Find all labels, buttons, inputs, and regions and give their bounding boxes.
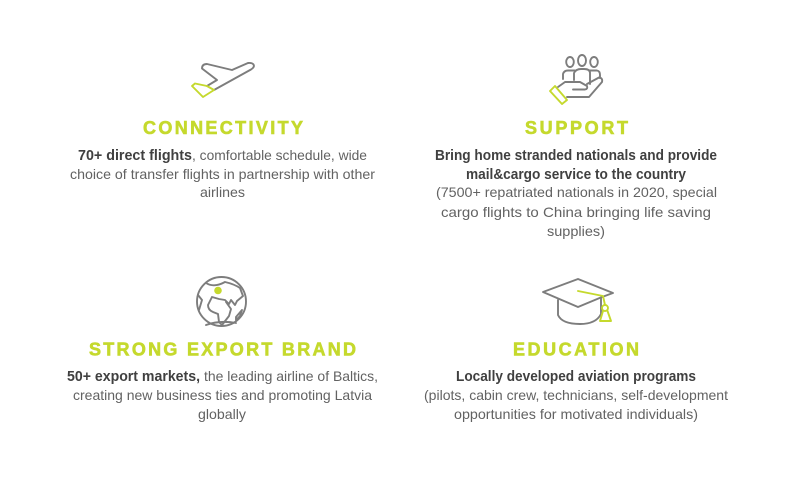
text block: support description: cargo flights to China bringing life saving (441, 204, 711, 220)
text block: support description: Bring home stranded nationals and provide (435, 148, 717, 164)
heading: education: EDUCATION (513, 340, 639, 360)
text block: education description: (pilots, cabin crew, technicians, self-development (424, 387, 728, 403)
text block: connectivity description: , comfortable schedule, wide (192, 147, 367, 163)
text block: connectivity description: choice of transfer flights in partnership with other (70, 166, 375, 182)
text block: export brand description: globally (198, 406, 246, 422)
text block: education description (424, 369, 728, 422)
heading: strong export brand: STRONG EXPORT BRAND (89, 340, 356, 360)
text block: export brand description: creating new business ties and promoting Latvia (73, 387, 372, 403)
text block: export brand description (67, 368, 378, 422)
text block: education description: opportunities for motivated individuals) (454, 406, 698, 422)
icon: globe (197, 277, 246, 326)
text block: connectivity description: airlines (200, 184, 245, 200)
icon: airplane (192, 63, 254, 97)
icon: graduation cap (543, 279, 613, 324)
text block: education description: Locally developed aviation programs (456, 369, 696, 385)
text block: support description (435, 148, 717, 239)
text block: connectivity description: 70+ direct flights (78, 148, 192, 164)
text block: export brand description: 50+ export markets, (67, 369, 200, 385)
text block: support description: (7500+ repatriated nationals in 2020, special (436, 184, 717, 200)
text block: connectivity description (70, 147, 375, 200)
icon: location dot (214, 287, 222, 294)
text block: support description: supplies) (547, 223, 605, 239)
heading: connectivity: CONNECTIVITY (143, 118, 303, 138)
panel: education (424, 279, 728, 422)
text block: export brand description: the leading airline of Baltics, (204, 368, 378, 384)
panel: strong export brand (67, 277, 378, 422)
panel: support (435, 55, 717, 239)
text block: support description: mail&cargo service to the country (466, 167, 686, 183)
heading: support: SUPPORT (525, 118, 628, 138)
icon: hand holding people (550, 55, 602, 104)
panel: connectivity (70, 63, 375, 200)
